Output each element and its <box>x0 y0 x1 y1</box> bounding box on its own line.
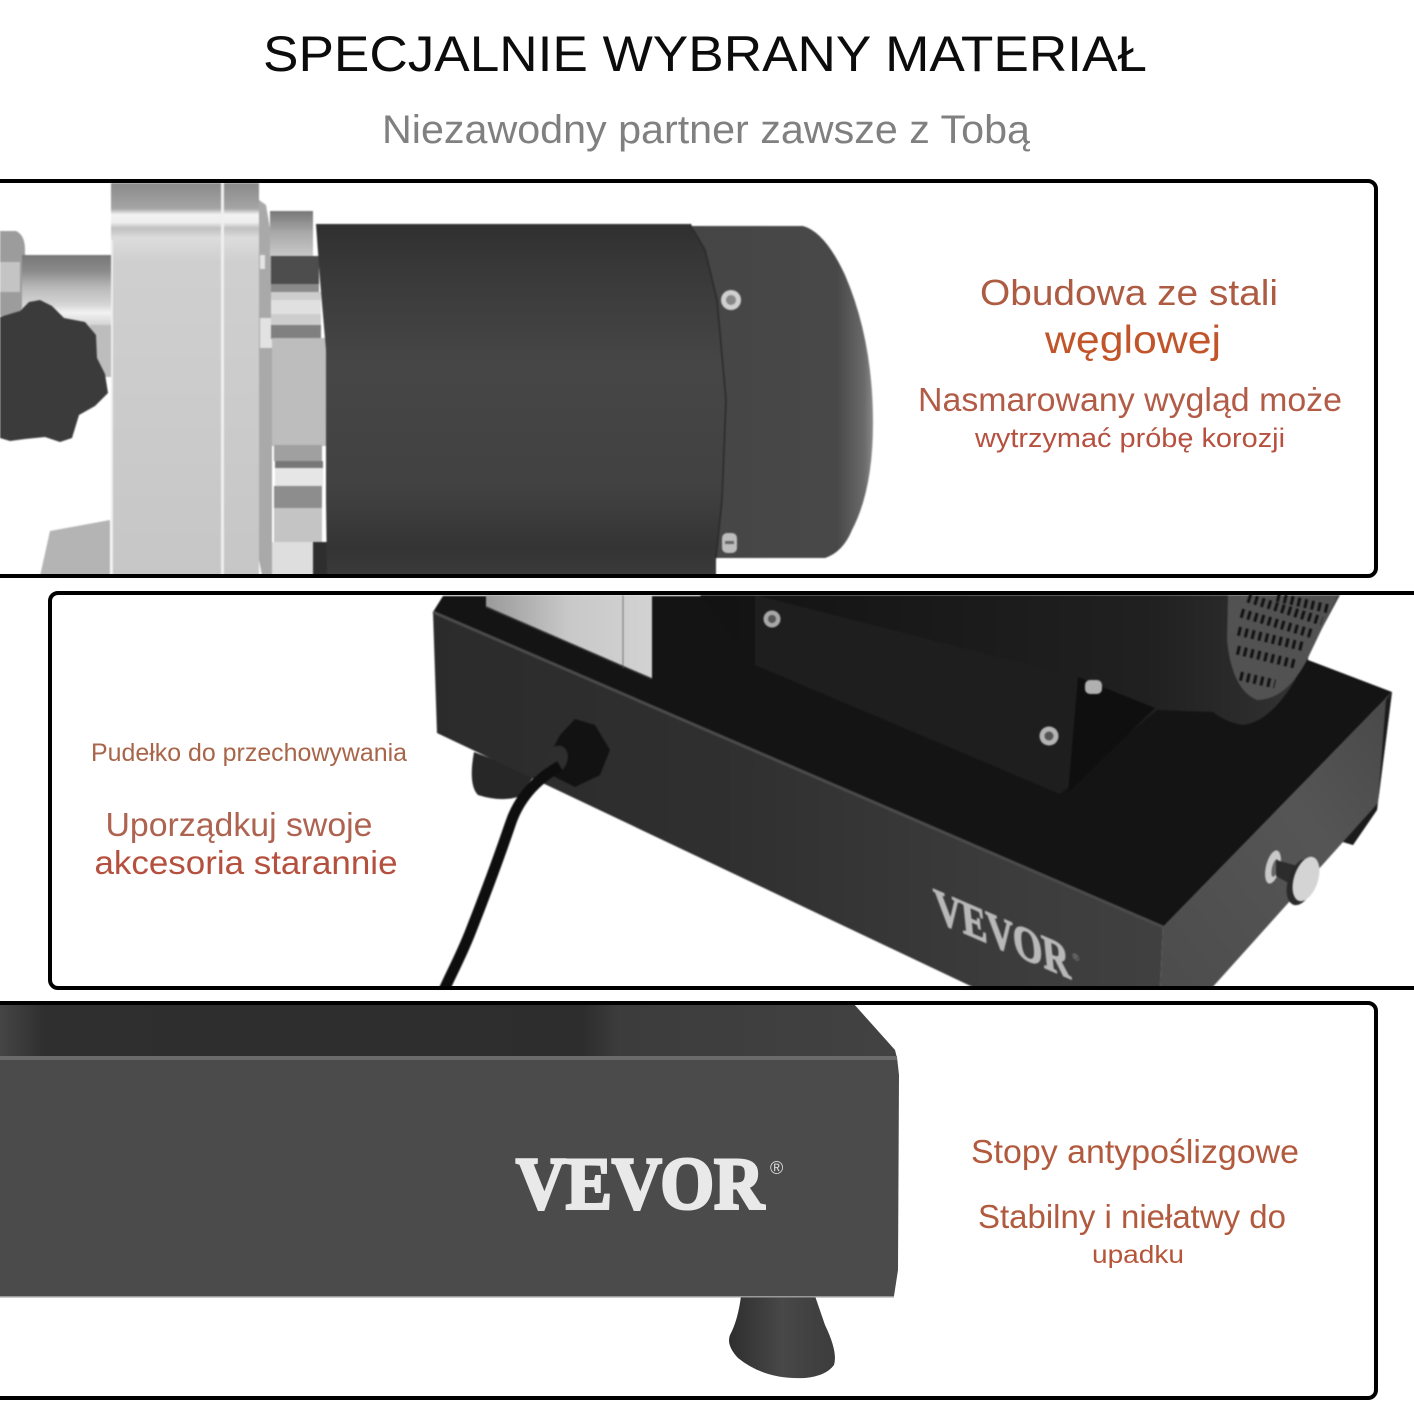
photo: base front with foot <box>0 1003 899 1378</box>
motor <box>700 595 1341 725</box>
anti-slip foot <box>729 1296 835 1378</box>
black star knob <box>0 300 108 442</box>
VEVOR logo on box <box>932 888 1080 981</box>
text: feet heading: Stopy antypoślizgowe <box>971 1133 1299 1170</box>
box front <box>0 1057 899 1296</box>
left cap <box>0 231 25 316</box>
text: feet description line 2: upadku <box>1092 1241 1184 1269</box>
text: housing description: Nasmarowany wygląd może <box>918 381 1342 418</box>
fan grille <box>1227 595 1338 700</box>
panel: anti-slip feet <box>0 1003 1376 1398</box>
cable gland <box>554 719 610 787</box>
panel: carbon steel housing <box>0 181 1376 576</box>
box top <box>0 1003 897 1058</box>
motor body <box>316 224 726 576</box>
shaft <box>22 255 112 335</box>
subtitle: Niezawodny partner zawsze z Tobą <box>382 108 1031 152</box>
text: storage description line 2: akcesoria starannie <box>94 844 398 881</box>
bracket screws <box>764 610 1102 746</box>
base plate foot <box>40 520 110 576</box>
gray plate <box>486 595 652 679</box>
VEVOR logo on box: VEVOR <box>932 878 1073 991</box>
bracket side <box>1068 677 1155 793</box>
text: feet description: Stabilny i niełatwy do <box>978 1198 1286 1235</box>
drawer knob <box>1264 850 1320 906</box>
far foot <box>472 752 535 799</box>
VEVOR logo: VEVOR <box>516 1144 765 1226</box>
text: storage description line 1: Uporządkuj swoje <box>106 806 372 843</box>
screws <box>721 290 741 553</box>
text: material name: węglowej <box>1044 319 1221 362</box>
photo: motor housing side view <box>0 183 873 576</box>
VEVOR logo <box>515 1158 783 1211</box>
panel frame <box>0 1003 1376 1398</box>
panel frame <box>0 181 1376 576</box>
photo: base box with motor <box>433 595 1392 995</box>
power cable <box>444 766 560 990</box>
panel frame <box>50 593 1414 988</box>
text: housing description line 2: wytrzymać próbę korozji <box>974 423 1285 453</box>
title: SPECJALNIE WYBRANY MATERIAŁ <box>263 26 1147 82</box>
VEVOR logo: ® <box>770 1158 783 1178</box>
front face <box>433 612 1163 990</box>
text: storage box caption: Pudełko do przechowywania <box>91 739 407 767</box>
motor rear cap <box>692 226 873 558</box>
bracket front <box>755 595 1077 794</box>
flange <box>259 200 272 576</box>
aluminium plate <box>111 183 259 576</box>
mounting blocks <box>270 211 313 256</box>
text: housing heading: Obudowa ze stali <box>980 272 1278 313</box>
base top <box>433 596 1392 927</box>
panel: storage box <box>50 593 1414 995</box>
right side face <box>1160 692 1392 990</box>
VEVOR logo on box: ® <box>1072 950 1080 964</box>
